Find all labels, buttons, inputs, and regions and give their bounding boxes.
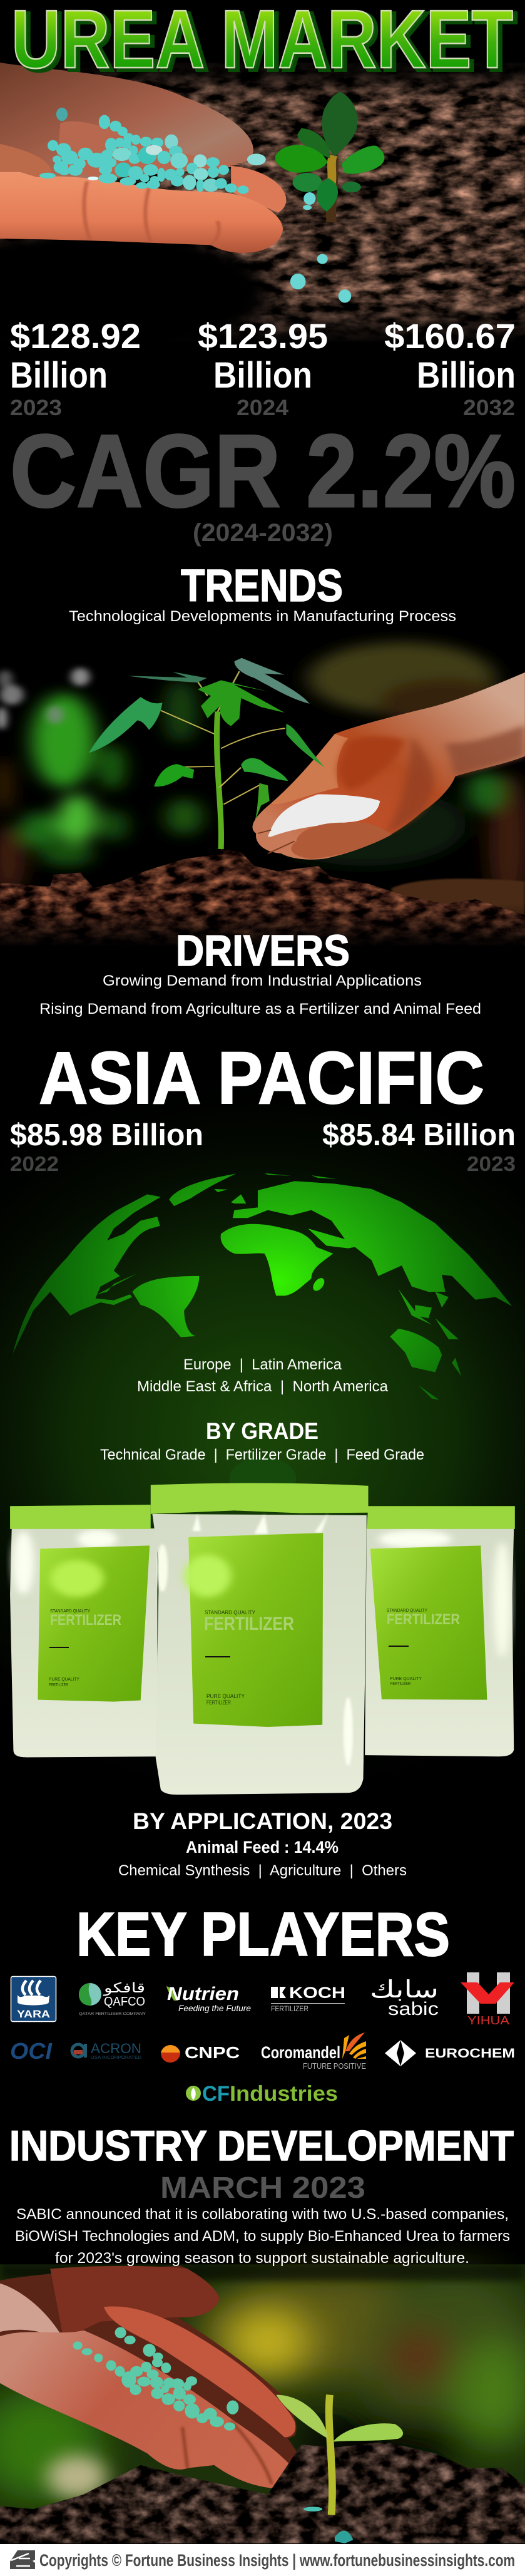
driver two: Rising Demand from Agriculture as a Fertilizer and Animal Feed — [39, 1001, 481, 1018]
green glow behind globe — [0, 1052, 525, 1816]
CAGR period: (2024-2032) — [193, 519, 333, 547]
stat: 2023 market size: 2023 — [10, 396, 62, 420]
right bag label text: FERTILIZER — [387, 1611, 460, 1628]
stat: 2024 market size: 2024 — [237, 396, 289, 420]
stat: 2023 market size: $128.92 — [10, 316, 141, 356]
logo: Nutrien: Feeding the Future — [178, 2003, 251, 2013]
stat: 2023 market size: Billion — [10, 355, 108, 396]
logo: EuroChem — [385, 2040, 515, 2066]
stat: 2024 market size: Billion — [213, 355, 312, 396]
grade list: Technical Grade | Fertilizer Grade | Feed Grade — [100, 1446, 424, 1463]
development description: for 2023's growing season to support sustainable agriculture. — [55, 2250, 469, 2267]
logo: Acron — [72, 2041, 141, 2060]
logo: Nutrien — [166, 1984, 251, 2013]
stat: Asia Pacific 2023: 2023 — [467, 1152, 516, 1175]
stat: Asia Pacific 2022: $85.98 Billion — [10, 1118, 203, 1152]
stat: 2032 market size: $160.67 — [384, 316, 516, 356]
right bag label text: STANDARD QUALITY — [387, 1609, 427, 1613]
development date: MARCH 2023 — [160, 2172, 365, 2205]
logo: QAFCO: QAFCO — [104, 1995, 145, 2009]
fertilizer bags — [10, 1457, 515, 1795]
left bag label text — [49, 1609, 121, 1687]
right bag label text — [387, 1609, 460, 1686]
stat: 2032 market size: 2032 — [463, 396, 515, 420]
photo: hand fertilising a young plant — [0, 642, 525, 947]
logo: QAFCO: QATAR FERTILISER COMPANY — [79, 2012, 146, 2016]
left bag label text: STANDARD QUALITY — [50, 1609, 90, 1614]
photo: hand with urea granules over soil — [0, 0, 525, 354]
center bag label text: STANDARD QUALITY — [205, 1609, 255, 1615]
logo: QAFCO: قافكو — [103, 1980, 145, 1996]
center bag label text: FERTILIZER — [206, 1699, 231, 1706]
heading: by grade: BY GRADE — [206, 1418, 319, 1444]
footer logo — [10, 2550, 35, 2569]
logo: Acron: USA INCORPORATED — [91, 2056, 141, 2060]
stat: Asia Pacific 2022 — [10, 1118, 203, 1175]
logo: Koch Fertilizer: KOCH — [289, 1984, 345, 2002]
heading: Asia Pacific: ASIA PACIFIC — [39, 1037, 484, 1120]
stat: 2032 market size: Billion — [417, 355, 516, 396]
driver one: Growing Demand from Industrial Applications — [103, 972, 422, 989]
trends text: Technological Developments in Manufacturing Process — [69, 608, 456, 625]
left bag label text: FERTILIZER — [49, 1682, 68, 1687]
development description: BiOWiSH Technologies and ADM, to supply Bio-Enhanced Urea to farmers — [15, 2228, 510, 2245]
animal feed share: Animal Feed : 14.4% — [186, 1838, 339, 1857]
other regions list — [137, 1356, 389, 1395]
logo: Nutrien: Nutrien — [167, 1984, 239, 2004]
stat: Asia Pacific 2023 — [322, 1118, 516, 1175]
logo: CF Industries — [186, 2082, 338, 2106]
logo: CNPC — [161, 2043, 240, 2063]
logo: EuroChem: EUROCHEM — [425, 2046, 515, 2061]
heading: drivers: DRIVERS — [176, 926, 350, 975]
left bag label text: PURE QUALITY — [49, 1676, 79, 1682]
photo: hand dropping granules beside a sprout — [0, 2263, 525, 2543]
logo: SABIC: سابك — [370, 1977, 439, 2003]
logo: Koch Fertilizer — [271, 1984, 345, 2013]
right bag label text: FERTILIZER — [390, 1681, 410, 1686]
logo: Coromandel: FUTURE POSITIVE — [303, 2061, 366, 2071]
left bag label text: FERTILIZER — [50, 1612, 121, 1629]
application list: Chemical Synthesis | Agriculture | Others — [118, 1862, 407, 1879]
logo: SABIC: sabic — [388, 1999, 439, 2019]
other regions list: Middle East & Africa | North America — [137, 1378, 389, 1395]
other regions list: Europe | Latin America — [183, 1356, 342, 1373]
heading: by application: BY APPLICATION, 2023 — [133, 1808, 392, 1834]
development description — [15, 2206, 510, 2267]
logo: Koch Fertilizer: FERTILIZER — [271, 2004, 308, 2013]
stat: Asia Pacific 2023: $85.84 Billion — [322, 1118, 516, 1152]
logo: OCI: OCI — [10, 2038, 53, 2064]
logo: CNPC: CNPC — [185, 2043, 240, 2062]
logo: SABIC — [370, 1977, 439, 2019]
right bag label text: PURE QUALITY — [390, 1676, 422, 1681]
logo: Yihua — [461, 1972, 514, 2027]
stat: 2024 market size: $123.95 — [198, 316, 328, 356]
logo: Coromandel — [261, 2032, 366, 2071]
heading: trends: TRENDS — [181, 561, 343, 611]
globe map — [13, 1173, 512, 1400]
center bag label text — [204, 1609, 294, 1706]
stat: Asia Pacific 2022: 2022 — [10, 1152, 59, 1175]
logo: Acron: ACRON — [91, 2041, 141, 2056]
logo: Coromandel: Coromandel — [261, 2043, 340, 2062]
logo: CF Industries: Industries — [230, 2082, 338, 2106]
center bag label text: PURE QUALITY — [206, 1693, 245, 1699]
development description: SABIC announced that it is collaborating with two U.S.-based companies, — [16, 2206, 509, 2223]
logo: Yara: YARA — [17, 2008, 50, 2020]
logo: Yara — [11, 1976, 56, 2021]
stat: 2024 market size — [198, 316, 328, 420]
logo: Yihua: YIHUA — [467, 2014, 509, 2027]
stat: 2032 market size — [384, 316, 516, 420]
logo: QAFCO — [79, 1980, 146, 2016]
heading: key players: KEY PLAYERS — [76, 1900, 450, 1969]
center bag label text: FERTILIZER — [204, 1614, 294, 1634]
logo: CF Industries: CF — [202, 2082, 230, 2106]
footer bar — [0, 2544, 525, 2576]
stat: 2023 market size — [10, 316, 141, 420]
